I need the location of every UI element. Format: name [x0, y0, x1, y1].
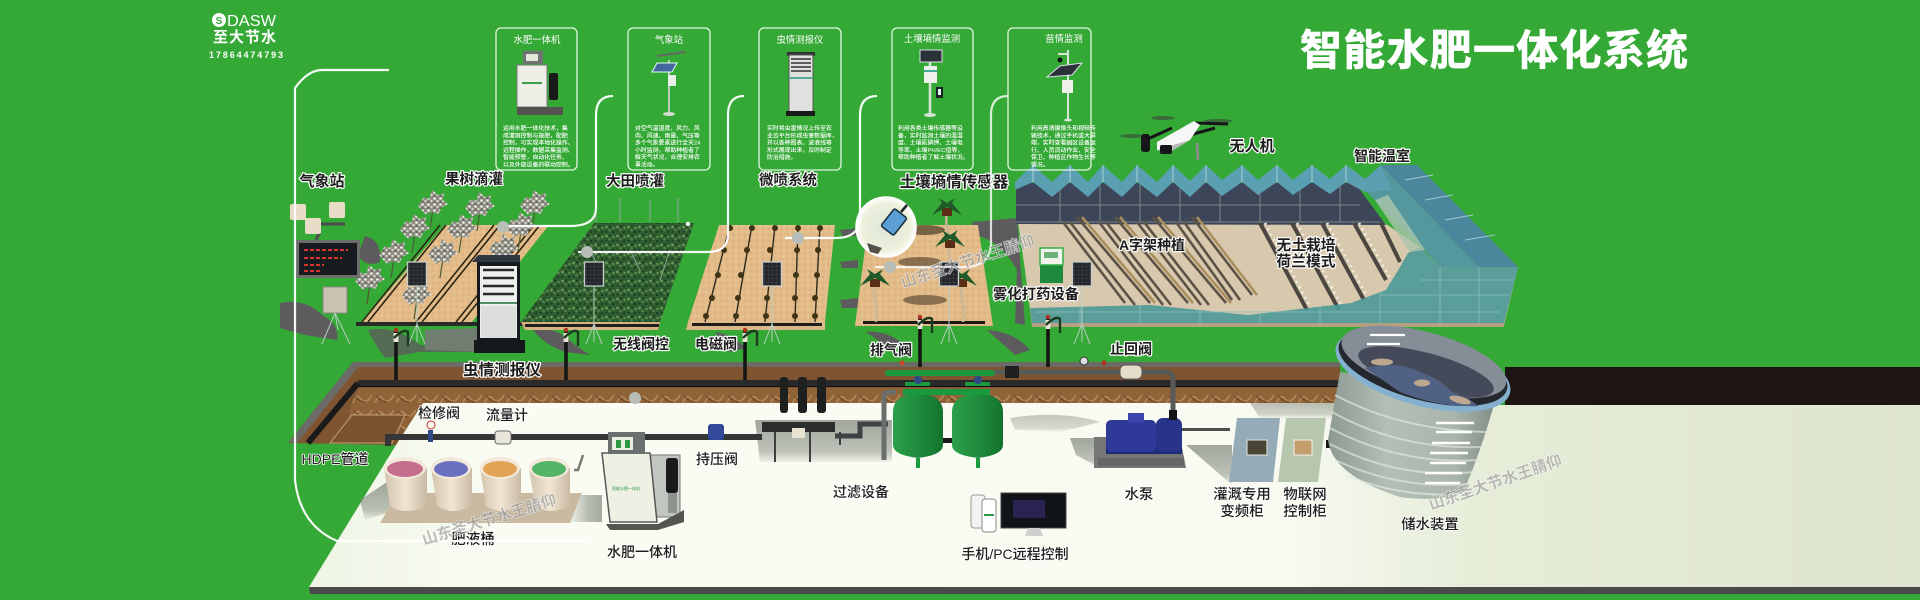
labels: upper scene: 雾化打药设备 [993, 285, 1080, 303]
watermarks: 山东圣大节水王腈仰 [420, 490, 559, 549]
logo: DASW [227, 13, 277, 30]
panel: seedling monitor: 利用高清摄像头和视频传 [1031, 124, 1096, 132]
panel: seedling monitor: 苗情监测 [1045, 33, 1083, 44]
labels: upper scene: 排气阀 [870, 342, 912, 358]
fertilizer tray [380, 493, 582, 523]
labels: floor scene: 持压阀 [696, 451, 738, 467]
labels: upper scene: 止回阀 [1110, 341, 1152, 357]
black band right of tank [1505, 367, 1920, 405]
labels: floor scene: 水泵 [1125, 486, 1153, 503]
panel: water-fertilizer machine: 远程操作，数据采集监测、 [503, 146, 574, 154]
panel: soil moisture monitor: 土壤墒情监测 [904, 33, 960, 44]
water tank [1327, 311, 1519, 499]
labels: floor scene: 储水装置 [1401, 516, 1459, 533]
labels: upper scene: 荷兰模式 [1276, 252, 1336, 270]
labels: floor scene: 控制柜 [1283, 503, 1327, 520]
pest monitor cabinet shadow [425, 328, 482, 352]
field: soil sensor [855, 198, 993, 326]
field: orchard drip irrigation [355, 190, 550, 326]
labels: upper scene [299, 138, 1410, 379]
fertilizer tanks [384, 457, 570, 511]
solar sensor posts [408, 262, 1092, 344]
panel: water-fertilizer machine [496, 28, 577, 170]
watermarks: 山东圣大节水王腈仰 [898, 231, 1037, 292]
panel: seedling monitor: 端，实时查看园区设备运 [1031, 139, 1096, 147]
panel: soil moisture monitor: 帮助种植者了解土壤状况。 [898, 153, 969, 161]
control cabinets [1229, 418, 1330, 482]
panel: seedling monitor: 情况。 [1031, 160, 1049, 168]
greenhouse [1015, 165, 1518, 327]
floor pipe [388, 421, 762, 470]
panel: soil moisture monitor: 备，实时监测土壤的温湿 [898, 131, 963, 139]
fertigation machine [602, 432, 684, 530]
panel: pest monitor: 形式展现出来，及时制定 [767, 146, 832, 154]
labels: floor scene: 物联网 [1283, 486, 1327, 503]
panel: pest monitor: 实时将虫害情况上传至农 [767, 124, 832, 132]
soil sensor bubble [856, 197, 916, 257]
spray equipment [1040, 248, 1063, 283]
filter equipment [762, 377, 896, 462]
panel: water-fertilizer machine: 控制，可实现本地化操作、 [503, 139, 574, 147]
labels: floor scene: 手机/PC远程控制 [961, 546, 1069, 562]
pest monitor cabinet [472, 255, 525, 353]
panel: pest monitor: 并以各种图表、波浪线等 [767, 139, 832, 147]
panel: seedling monitor: 输技术，通过手机或大屏 [1031, 131, 1096, 139]
panel: water-fertilizer machine: 水肥一体机 [514, 34, 561, 45]
labels: upper scene: 大田喷灌 [606, 173, 664, 190]
labels: floor scene: 流量计 [486, 407, 528, 423]
connector lines [295, 70, 1008, 541]
labels: upper scene: 智能温室 [1354, 148, 1410, 164]
phone and PC control [971, 493, 1066, 536]
panel: weather station: 向、风速、雨量、气压等 [635, 131, 700, 139]
floor slab [309, 403, 1920, 594]
title: 智能水肥一体化系统 [1300, 27, 1688, 74]
field: sprinkler crops [521, 198, 694, 330]
field: micro spray [686, 225, 835, 330]
labels: floor scene: 灌溉专用 [1213, 486, 1271, 503]
labels: upper scene: 果树滴灌 [445, 170, 503, 188]
panel: soil moisture monitor: 利用各类土壤传感器等设 [898, 124, 963, 132]
panel: water-fertilizer machine: 智能预警，自动化任务、 [503, 153, 568, 161]
pump [1094, 410, 1230, 468]
panel: water-fertilizer machine: 以及外部设备的联动控制。 [503, 160, 574, 168]
labels: floor scene: 过滤设备 [833, 484, 889, 500]
labels: upper scene: A字架种植 [1119, 237, 1185, 253]
watermarks: 山东圣大节水王腈仰 [1426, 450, 1564, 514]
panel: water-fertilizer machine: 成灌溉控制与施肥，配肥 [503, 131, 568, 139]
panel: soil moisture monitor: 导率、土壤PH/EC值等， [898, 146, 963, 154]
drone [1120, 116, 1232, 160]
watermarks [420, 231, 1564, 549]
panel: soil moisture monitor [892, 28, 973, 170]
labels: upper scene: 虫情测报仪 [463, 360, 541, 379]
ground shadows [280, 218, 1030, 358]
weather station [290, 202, 360, 344]
equipment shadows on floor [360, 403, 1335, 522]
panel: pest monitor: 虫情测报仪 [777, 34, 824, 45]
panel: pest monitor: 业云平台形成虫害数据库， [767, 131, 838, 139]
logo [209, 13, 283, 60]
panel: seedling monitor: 行、人员流动作业、安全 [1031, 146, 1096, 154]
upper gray pipe with check valve [900, 357, 1173, 412]
labels: floor scene: HDPE管道 [302, 451, 368, 467]
labels: upper scene: 土壤墒情传感器 [900, 172, 1009, 191]
panel: weather station: 事活动。 [635, 160, 659, 168]
labels: upper scene: 无人机 [1229, 138, 1275, 155]
sand filter tanks [885, 370, 1003, 468]
labels: floor scene: 水肥一体机 [607, 544, 677, 560]
labels: upper scene: 电磁阀 [695, 336, 737, 352]
panel: weather station: 解天气状况，合理安排农 [635, 153, 700, 161]
logo: S [216, 16, 223, 27]
labels: upper scene: 无线阀控 [613, 336, 669, 352]
panel: seedling monitor [1008, 28, 1096, 170]
trench [288, 362, 1340, 445]
panel: soil moisture monitor: 度、土壤氮磷钾、土壤电 [898, 139, 963, 147]
panel: weather station: 气象站 [655, 34, 683, 45]
logo: 17864474793 [209, 50, 283, 60]
labels: floor scene [302, 405, 1459, 562]
panel: pest monitor: 防治措施。 [767, 153, 796, 161]
valve risers [394, 315, 1060, 380]
fertigation machine: 智能水肥一体机 [612, 485, 640, 491]
panel: weather station: 对空气温湿度、风力、风 [635, 124, 700, 132]
panel: seedling monitor: 保卫、种植区作物生长等 [1031, 153, 1096, 161]
labels: upper scene: 微喷系统 [759, 171, 817, 189]
labels: floor scene: 检修阀 [418, 405, 460, 421]
labels: upper scene: 气象站 [299, 172, 345, 190]
labels: floor scene: 肥液桶 [451, 531, 495, 548]
panel: pest monitor [759, 28, 841, 170]
panel: weather station: 多个气象要素进行全天24 [635, 139, 701, 147]
panel: weather station: 小时监测，帮助种植者了 [635, 146, 700, 154]
panel: water-fertilizer machine: 运用水肥一体化技术，集 [503, 124, 568, 132]
labels: upper scene: 无土栽培 [1276, 236, 1336, 254]
panel: weather station [628, 28, 710, 170]
labels: floor scene: 变频柜 [1220, 502, 1264, 520]
logo: 至大节水 [213, 28, 276, 46]
